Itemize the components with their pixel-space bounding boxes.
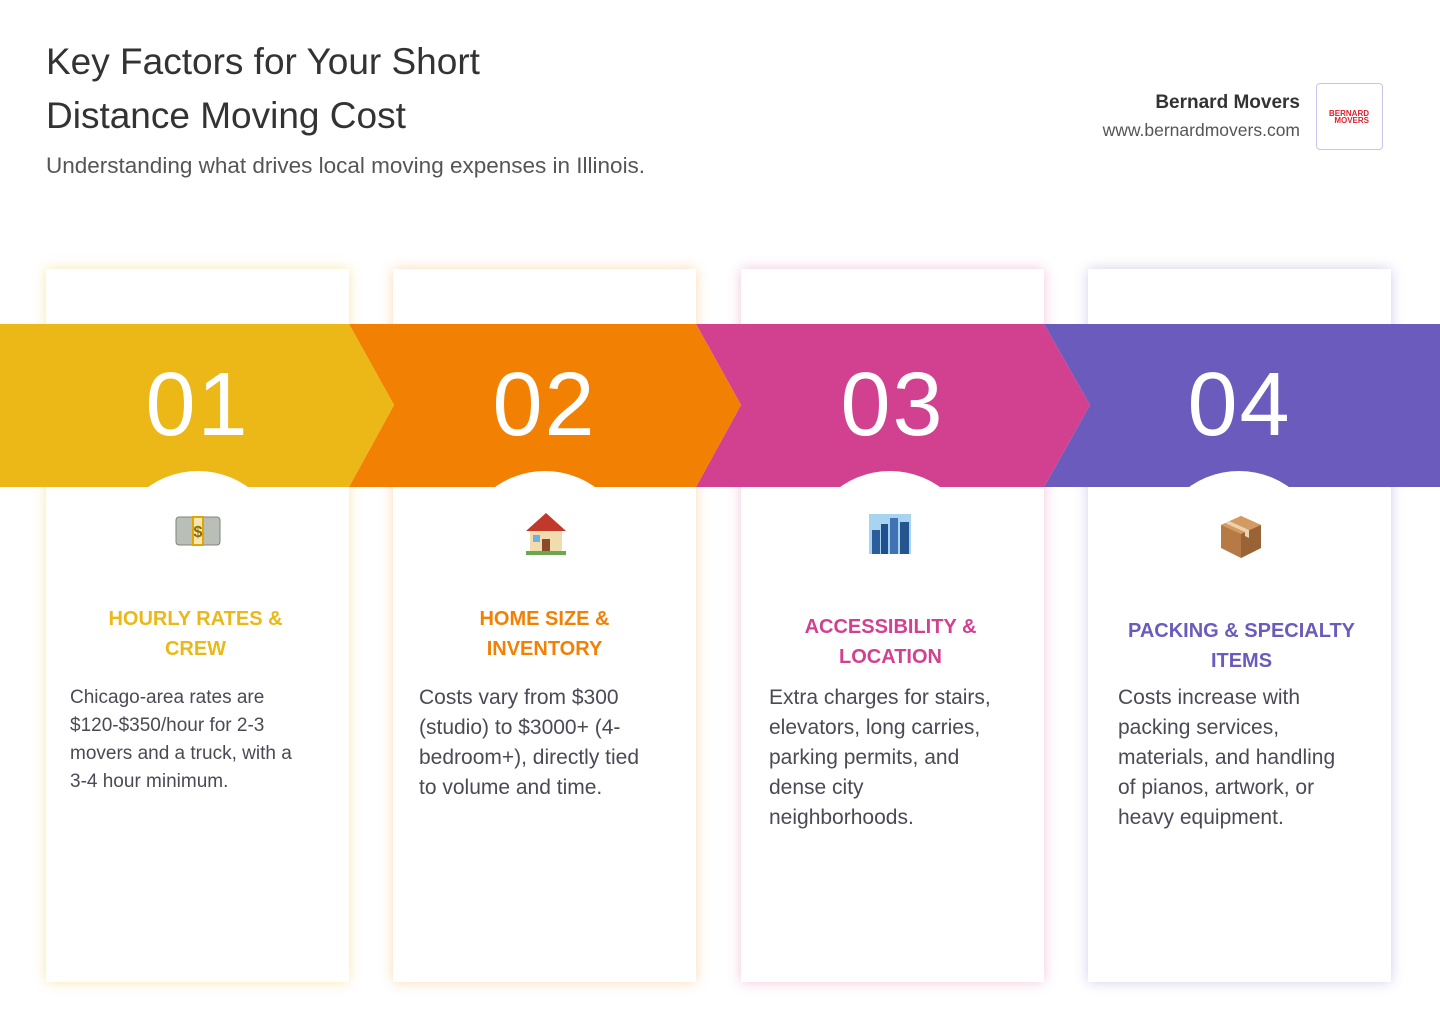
heading 4: ITEMS — [1211, 650, 1272, 672]
subtitle: Understanding what drives local moving expenses in Illinois. — [46, 153, 645, 178]
card 4 — [1088, 269, 1391, 982]
arrow 4 — [1044, 324, 1440, 487]
title: Key Factors for Your Short — [46, 41, 480, 82]
brand block — [1102, 83, 1383, 150]
logo: BERNARD — [1329, 109, 1369, 118]
icon: box — [1221, 516, 1261, 558]
title: Distance Moving Cost — [46, 95, 406, 136]
text: 02 — [492, 355, 597, 455]
numbers: 01 — [145, 355, 250, 455]
heading 2: INVENTORY — [487, 638, 602, 660]
icon: money: $ — [194, 524, 203, 541]
heading 2: HOME SIZE & — [479, 608, 610, 630]
arrow 2 — [349, 324, 741, 487]
heading 4: PACKING & SPECIALTY — [1128, 620, 1355, 642]
card 1 — [46, 269, 349, 982]
logo — [1316, 83, 1383, 150]
icon: house — [526, 513, 566, 555]
text: 04 — [1187, 355, 1292, 455]
arrow band — [0, 324, 1440, 487]
brand text: www.bernardmovers.com — [1103, 120, 1300, 140]
text: 03 — [840, 355, 945, 455]
icon: money — [176, 516, 220, 546]
body 3: Extra charges for stairs, elevators, long carries, parking permits, and dense city neighborhoods. — [769, 686, 991, 829]
heading 1: HOURLY RATES & — [108, 608, 283, 630]
heading 2 — [479, 608, 610, 660]
body 1: Chicago-area rates are $120-$350/hour for 2-3 movers and a truck, with a 3-4 hour minimum. — [70, 687, 292, 792]
card 2 — [393, 269, 696, 982]
arrow 1 — [0, 324, 394, 487]
body 2: Costs vary from $300 (studio) to $3000+ (4-bedroom+), directly tied to volume and time. — [419, 686, 639, 799]
heading 4 — [1128, 620, 1355, 672]
heading 3: ACCESSIBILITY & — [805, 616, 976, 638]
title — [46, 41, 480, 136]
arrow 3 — [696, 324, 1090, 487]
body 4: Costs increase with packing services, materials, and handling of pianos, artwork, or heavy equipment. — [1118, 686, 1335, 829]
circles — [112, 471, 284, 643]
icon: city — [869, 514, 911, 554]
card 3 — [741, 269, 1044, 982]
heading 1 — [108, 608, 283, 660]
brand text: Bernard Movers — [1155, 92, 1300, 113]
heading 3: LOCATION — [839, 646, 942, 668]
logo: MOVERS — [1334, 116, 1369, 125]
heading 3 — [805, 616, 976, 668]
brand text — [1102, 92, 1300, 140]
heading 1: CREW — [165, 638, 226, 660]
